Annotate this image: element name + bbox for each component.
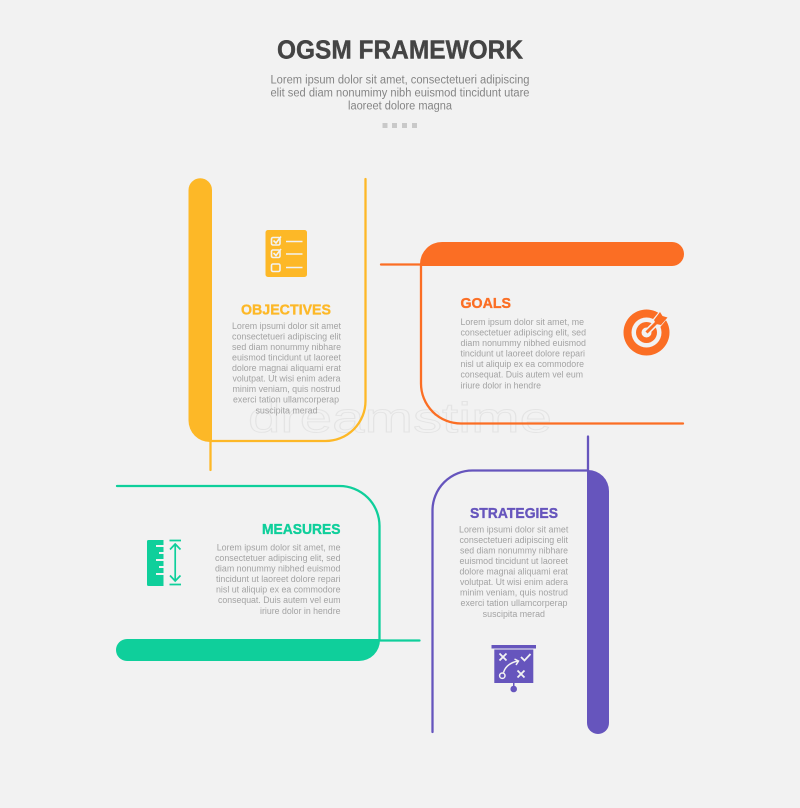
measures body text: tincidunt ut laoreet dolore repari (216, 574, 341, 584)
icon: checklist (266, 230, 307, 277)
objectives body text: Lorem ipsumi dolor sit amet (232, 321, 342, 331)
panel: goals (381, 242, 684, 424)
panel: strategies (432, 436, 609, 734)
icon: strategy board (492, 645, 536, 692)
strategies body text: minim veniam, quis nostrud (460, 588, 568, 598)
objectives body text: sed diam nonummy nibhare (232, 342, 341, 352)
subtitle text block (270, 74, 530, 112)
measures body text: nisl ut aliquip ex ea commodore (216, 584, 341, 594)
objectives body text: euismod tincidunt ut laoreet (232, 352, 342, 362)
goals body text: Lorem ipsum dolor sit amet, me (460, 317, 584, 327)
objectives body text: suscipita merad (256, 406, 318, 416)
pagination dots (382, 123, 417, 128)
subtitle text block: elit sed diam nonumimy nibh euismod tincidunt utare (270, 88, 530, 100)
panel: measures (116, 486, 420, 661)
goals body text: nisl ut aliquip ex ea commodore (460, 359, 584, 369)
watermark: dreamstime (248, 394, 552, 441)
strategies body text: volutpat. Ut wisi enim adera (460, 577, 568, 587)
goals body text: iriure dolor in hendre (460, 380, 541, 390)
title: OGSM FRAMEWORK (277, 34, 523, 64)
goals body text: consequat. Duis autem vel eum (460, 370, 583, 380)
measures body text: iriure dolor in hendre (260, 606, 341, 616)
goals body text: consectetuer adipiscing elit, sed (460, 328, 586, 338)
strategies heading: STRATEGIES (470, 505, 558, 522)
strategies body text: dolore magnai aliquami erat (460, 567, 569, 577)
objectives bar (188, 178, 212, 442)
objectives body text: minim veniam, quis nostrud (232, 384, 341, 394)
goals bar (420, 242, 684, 266)
strategies body text: exerci tation ullamcorperap (460, 598, 568, 608)
measures body text: consequat. Duis autem vel eum (218, 595, 340, 605)
objectives body text: volutpat. Ut wisi enim adera (232, 374, 341, 384)
goals body text (460, 317, 586, 390)
measures body text (215, 542, 341, 616)
subtitle text block: laoreet dolore magna (348, 100, 453, 112)
objectives heading: OBJECTIVES (241, 302, 331, 318)
subtitle text block: Lorem ipsum dolor sit amet, consectetueri adipiscing (270, 74, 530, 86)
measures body text: diam nonummy nibhed euismod (215, 563, 341, 573)
goals body text: tincidunt ut laoreet dolore repari (460, 348, 585, 358)
objectives body text: consectetueri adipiscing elit (232, 332, 342, 342)
strategies body text: euismod tincidunt ut laoreet (460, 556, 569, 566)
objectives body text: exerci tation ullamcorperap (233, 394, 339, 404)
icon: ruler with height arrow (147, 540, 181, 586)
measures heading: MEASURES (262, 521, 340, 538)
goals body text: diam nonummy nibhed euismod (460, 338, 586, 348)
goals frame (381, 264, 683, 424)
objectives frame (210, 179, 366, 470)
goals heading: GOALS (460, 295, 511, 312)
measures bar (116, 639, 380, 661)
strategies body text: Lorem ipsumi dolor sit amet (459, 525, 569, 535)
measures body text: Lorem ipsum dolor sit amet, me (217, 542, 341, 552)
strategies body text: suscipita merad (483, 609, 545, 619)
measures body text: consectetuer adipiscing elit, sed (215, 553, 341, 563)
panel: objectives (188, 178, 366, 470)
strategies bar (587, 470, 609, 734)
strategies frame (432, 436, 588, 732)
measures frame (117, 486, 420, 640)
icon: target with arrow (624, 310, 670, 356)
objectives body text: dolore magnai aliquami erat (232, 363, 342, 373)
objectives body text (232, 321, 342, 416)
strategies body text: sed diam nonummy nibhare (460, 546, 568, 556)
strategies body text (459, 525, 569, 619)
strategies body text: consectetueri adipiscing elit (460, 535, 569, 545)
